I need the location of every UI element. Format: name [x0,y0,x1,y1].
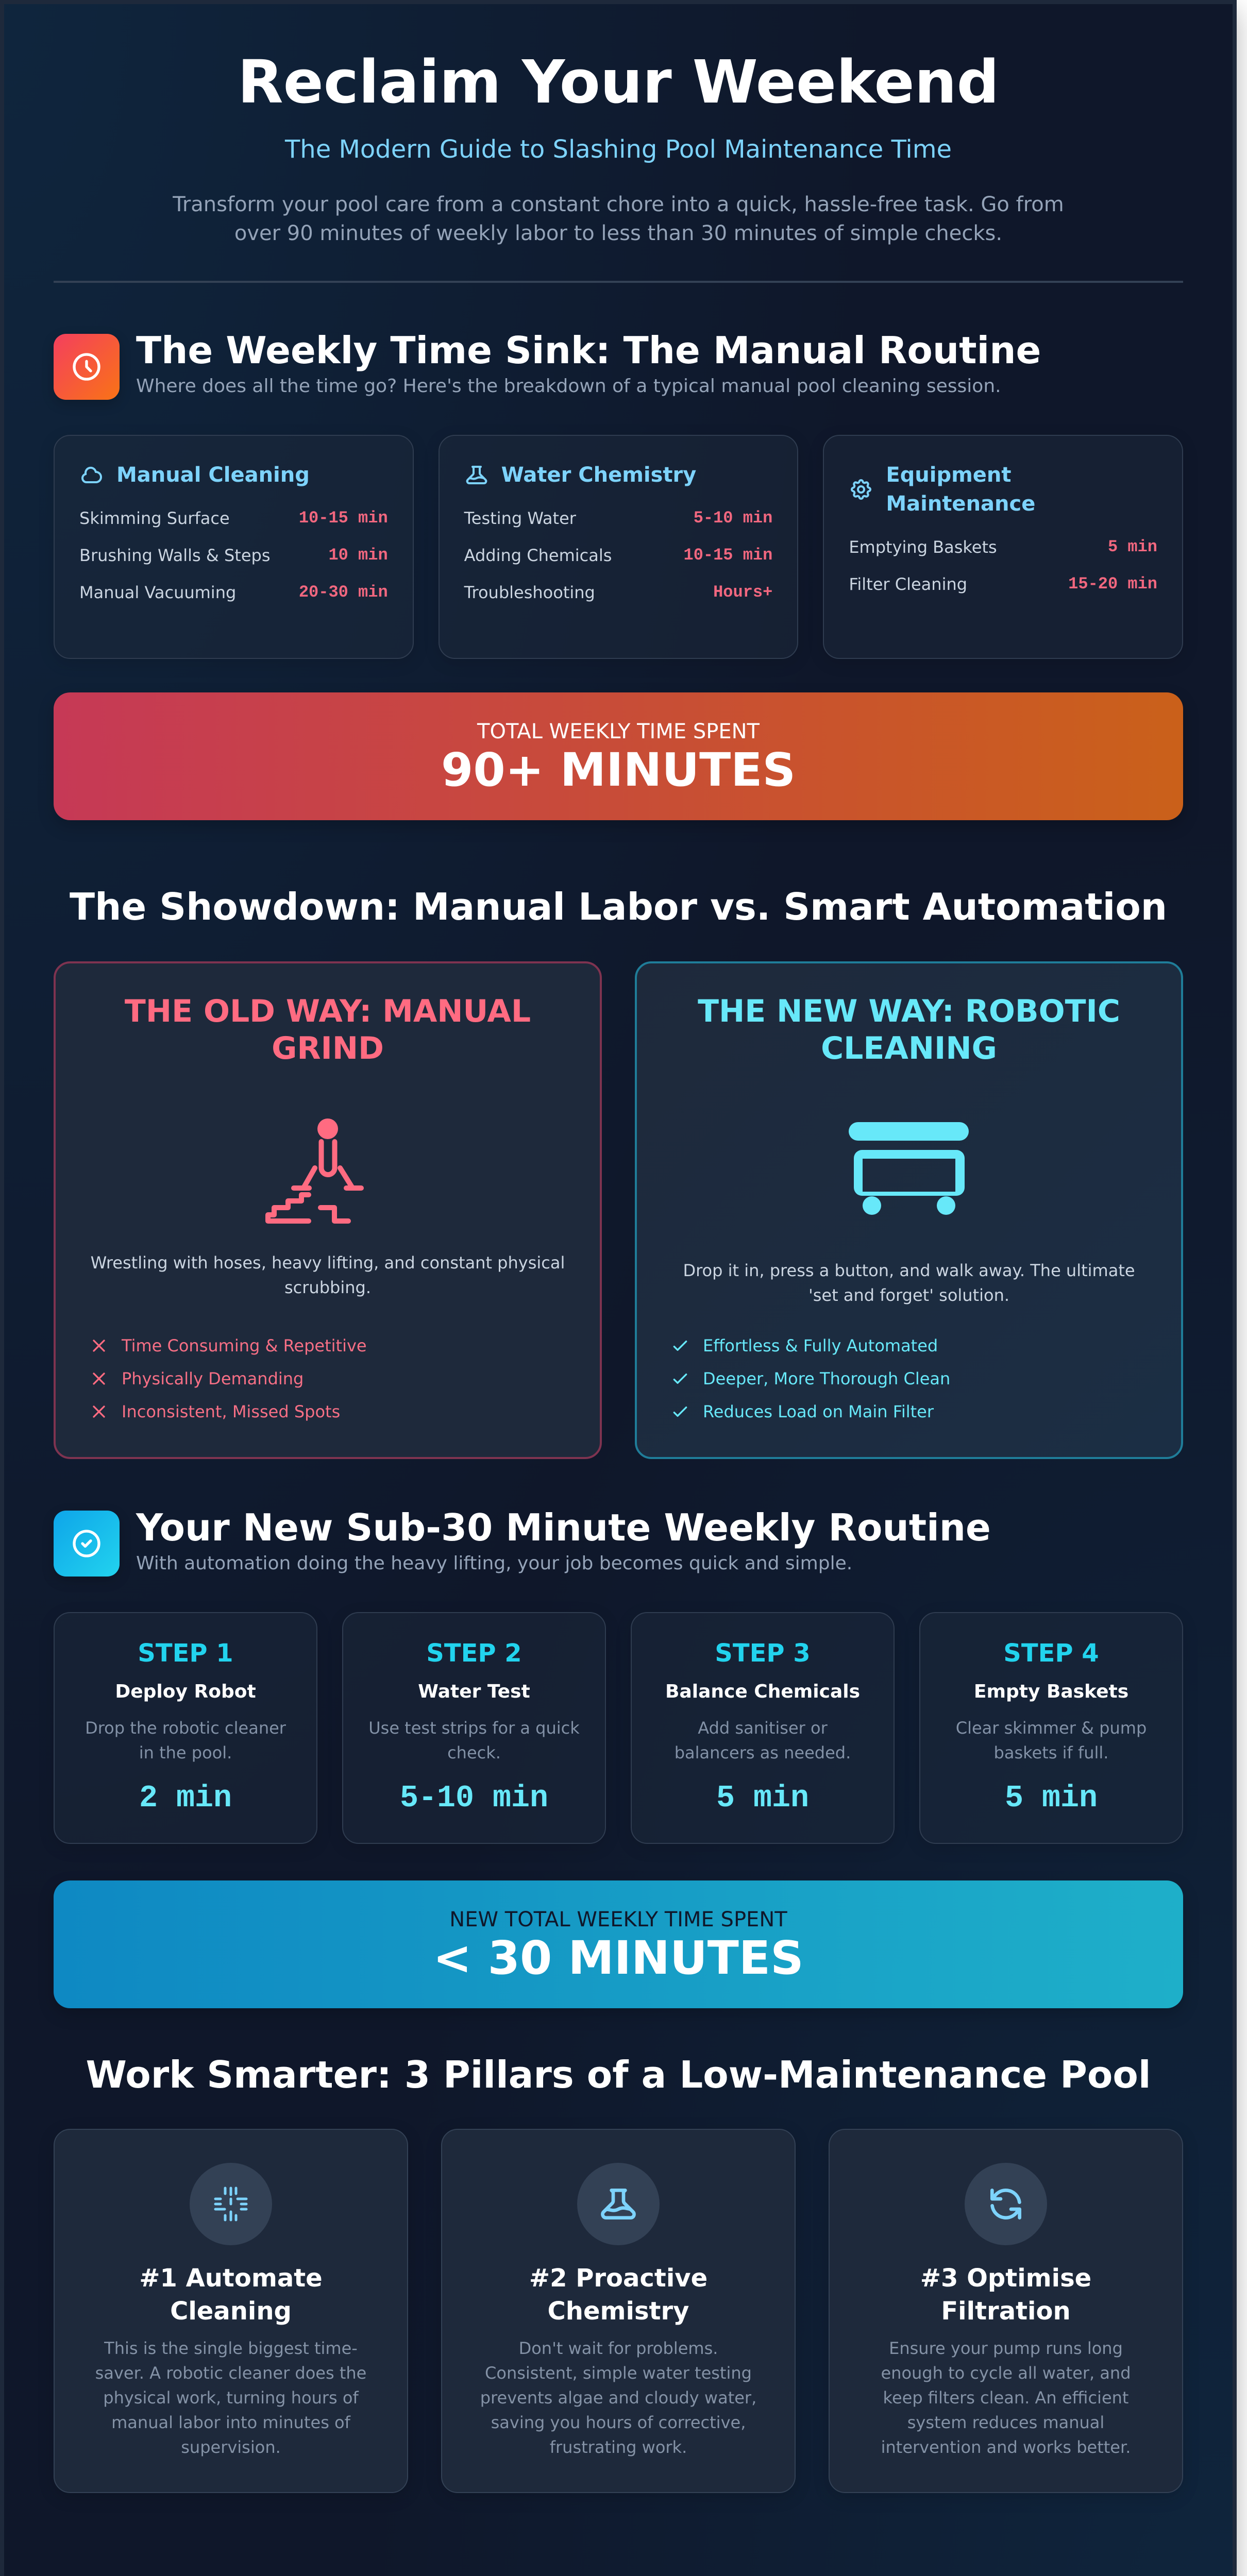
row: troubleshooting [464,583,772,602]
new way heading: THE NEW WAY: ROBOTIC [698,993,1120,1029]
row: vacuuming: 20-30 min [299,583,388,602]
step 4 name: Empty Baskets [974,1681,1128,1702]
pillar 3 description: enough to cycle all water, and [881,2363,1131,2383]
panel: step 3 [631,1612,895,1844]
step 3 name: Balance Chemicals [665,1681,860,1702]
step 1 time: 2 min [139,1781,232,1816]
panel: step 4 [919,1612,1183,1844]
icon: refresh arrows [965,2163,1047,2245]
row: adding chemicals: Adding Chemicals [464,546,612,565]
old way heading [125,993,531,1066]
new way heading [637,993,1181,1067]
old way description: scrubbing. [284,1278,371,1297]
drawback: inconsistent: Inconsistent, Missed Spots [122,1402,340,1421]
row: testing: 5-10 min [694,509,772,528]
step 4 time: 5 min [1005,1781,1098,1816]
old way description [91,1253,565,1297]
panel: pillar 1 [54,2129,408,2493]
heading: three pillars: Work Smarter: 3 Pillars of a Low-Maintenance Pool [86,2053,1151,2096]
pillar 2 description: Consistent, simple water testing [485,2363,752,2383]
drawback: physically demanding [89,1368,552,1389]
pillar 3 description: keep filters clean. An efficient [883,2388,1128,2408]
old way description: Wrestling with hoses, heavy lifting, and constant physical [91,1253,565,1273]
row: brushing: Brushing Walls & Steps [79,546,270,565]
row: adding chemicals [464,546,772,565]
panel: step 2 [342,1612,606,1844]
panel: old way [54,961,602,1459]
step 3 label: STEP 3 [715,1639,811,1668]
benefit: reduces load [670,1401,1134,1422]
step 2 description: check. [447,1743,501,1762]
icon: clock [54,334,120,400]
icon: check circle [54,1511,120,1577]
row: vacuuming: Manual Vacuuming [79,583,236,602]
row: baskets [849,537,1157,557]
step 3 time: 5 min [716,1781,809,1816]
icon: beaker [577,2163,660,2245]
pillar 3 heading: #3 Optimise [920,2264,1091,2293]
pillar 1 description: manual labor into minutes of [111,2413,350,2432]
callout: total 90+ minutes [54,692,1183,820]
pillar 2 heading: Chemistry [548,2297,689,2326]
step 2 description [343,1716,605,1765]
pillar 2 heading: #2 Proactive [529,2264,707,2293]
pillar 3 description: intervention and works better. [881,2437,1131,2457]
panel: pillar 3 [829,2129,1183,2493]
row: troubleshooting: Hours+ [713,583,772,602]
pillar 3 description: Ensure your pump runs long [889,2338,1123,2358]
benefit: deeper clean [670,1368,1134,1389]
row: filter: 15-20 min [1068,574,1157,594]
pillar 2 description: saving you hours of corrective, [491,2413,746,2432]
row: vacuuming [79,583,388,602]
row: skimming: Skimming Surface [79,509,230,528]
row: testing [464,509,772,528]
new way description: Drop it in, press a button, and walk away. The ultimate [683,1261,1135,1280]
pillar 1 description [55,2336,407,2460]
step 4 description [920,1716,1182,1765]
step 3 description [632,1716,894,1765]
pillar 3 heading [830,2262,1182,2328]
row: skimming: 10-15 min [299,509,388,528]
card heading: manual cleaning: Manual Cleaning [116,463,310,487]
panel: equipment maintenance [823,435,1183,659]
section intro: time sink: Where does all the time go? Here's the breakdown of a typical manual pool cleaning session. [136,376,1001,397]
icon: robot cleaner [840,1113,979,1216]
new way description: 'set and forget' solution. [808,1285,1009,1305]
step 2 description: Use test strips for a quick [368,1718,580,1738]
panel: step 1 [54,1612,317,1844]
step 3 description: Add sanitiser or [698,1718,828,1738]
pillar 3 heading: Filtration [941,2297,1071,2326]
benefit: deeper clean: Deeper, More Thorough Clean [703,1369,950,1388]
step 2 name: Water Test [418,1681,530,1702]
pillar 2 description [442,2336,795,2460]
step 4 label: STEP 4 [1003,1639,1099,1668]
card heading: equipment maintenance [851,463,1035,516]
new way description [670,1258,1148,1308]
icon: person on stairs [265,1118,364,1224]
step 1 description [55,1716,316,1765]
callout: new total under 30 minutes [54,1880,1183,2008]
drawback: physically demanding: Physically Demanding [122,1369,304,1388]
row: adding chemicals: 10-15 min [683,546,772,565]
heading: weekly time sink: The Weekly Time Sink: The Manual Routine [136,329,1041,372]
row: filter: Filter Cleaning [849,574,967,594]
pillar 1 description: supervision. [181,2437,281,2457]
panel: new way [635,961,1183,1459]
row: brushing [79,546,388,565]
pillar 1 description: physical work, turning hours of [103,2388,359,2408]
pillar 1 description: saver. A robotic cleaner does the [95,2363,366,2383]
step 4 description: baskets if full. [994,1743,1108,1762]
benefit: effortless: Effortless & Fully Automated [703,1336,938,1355]
icon: chip [190,2163,272,2245]
step 4 description: Clear skimmer & pump [956,1718,1147,1738]
drawback: time consuming: Time Consuming & Repetitive [122,1336,367,1355]
intro paragraph: Transform your pool care from a constant chore into a quick, hassle-free task. Go from [173,193,1064,216]
subtitle: The Modern Guide to Slashing Pool Maintenance Time [285,135,952,164]
step 2 time: 5-10 min [400,1781,548,1816]
step 2 label: STEP 2 [426,1639,522,1668]
new way heading: CLEANING [821,1030,997,1066]
step 1 description: Drop the robotic cleaner [85,1718,286,1738]
heading: showdown: The Showdown: Manual Labor vs. Smart Automation [70,885,1167,928]
card heading: water chemistry: Water Chemistry [501,463,696,487]
pillar 3 description [830,2336,1182,2460]
row: testing: Testing Water [464,509,576,528]
pillar 1 heading [55,2262,407,2328]
row: troubleshooting: Troubleshooting [464,583,595,602]
card heading: equipment maintenance: Equipment [886,463,1012,487]
row: skimming [79,509,388,528]
card heading: equipment maintenance: Maintenance [886,492,1035,516]
row: brushing: 10 min [328,546,388,565]
pillar 2 description: Don't wait for problems. [519,2338,718,2358]
panel: water chemistry [439,435,798,659]
callout value: < 30 MINUTES [433,1931,804,1985]
benefit: effortless [670,1335,1134,1356]
title: Reclaim Your Weekend [238,48,999,117]
old way heading: THE OLD WAY: MANUAL [125,993,531,1029]
pillar 1 description: This is the single biggest time- [104,2338,358,2358]
callout label: TOTAL WEEKLY TIME SPENT [477,720,760,743]
panel: pillar 2 [441,2129,796,2493]
pillar 1 heading: Cleaning [170,2297,292,2326]
benefit: reduces load: Reduces Load on Main Filter [703,1402,934,1421]
step 1 name: Deploy Robot [115,1681,256,1702]
old way heading: GRIND [272,1030,384,1066]
pillar 2 description: prevents algae and cloudy water, [480,2388,756,2408]
pillar 3 description: system reduces manual [907,2413,1104,2432]
section intro: routine: With automation doing the heavy lifting, your job becomes quick and simple. [136,1553,852,1574]
callout label: NEW TOTAL WEEKLY TIME SPENT [449,1908,787,1931]
row: baskets: 5 min [1108,537,1157,556]
intro paragraph: over 90 minutes of weekly labor to less than 30 minutes of simple checks. [234,222,1002,245]
heading: sub-30 routine: Your New Sub-30 Minute Weekly Routine [136,1506,991,1549]
pillar 1 heading: #1 Automate [139,2264,323,2293]
pillar 2 heading [442,2262,795,2328]
callout value: 90+ MINUTES [441,743,796,797]
panel: manual cleaning [54,435,414,659]
pillar 2 description: frustrating work. [550,2437,687,2457]
row: baskets: Emptying Baskets [849,537,997,557]
step 1 description: in the pool. [139,1743,232,1762]
intro paragraph [173,193,1064,245]
row: filter [849,574,1157,594]
drawback: inconsistent [89,1401,552,1422]
step 1 label: STEP 1 [138,1639,233,1668]
step 3 description: balancers as needed. [675,1743,851,1762]
